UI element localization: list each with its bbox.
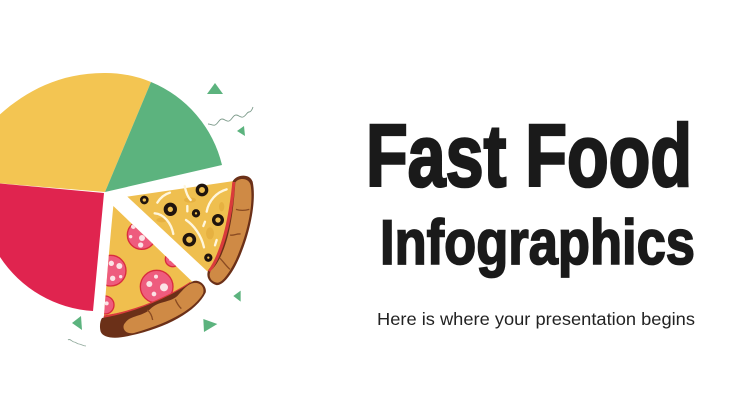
pie slice: red xyxy=(0,182,104,311)
subtitle: Here is where your presentation begins xyxy=(377,309,695,329)
pie chart xyxy=(0,73,222,311)
pizza slice: olives xyxy=(127,176,254,285)
triangle: top xyxy=(207,83,223,94)
cheese strands xyxy=(155,186,227,247)
triangle: bottom left xyxy=(72,316,82,330)
title xyxy=(366,106,695,278)
pepperoni xyxy=(104,224,176,315)
triangle: small right xyxy=(237,126,245,136)
pie slice: yellow xyxy=(0,73,151,192)
pizza slice: pepperoni xyxy=(95,206,206,338)
squiggle: bottom xyxy=(68,339,86,346)
pizza slices xyxy=(95,176,254,338)
olives xyxy=(141,185,222,260)
squiggle: top xyxy=(208,107,253,125)
triangle: right xyxy=(233,291,241,302)
triangle: bottom xyxy=(203,319,217,332)
pie slice: green xyxy=(105,82,222,192)
